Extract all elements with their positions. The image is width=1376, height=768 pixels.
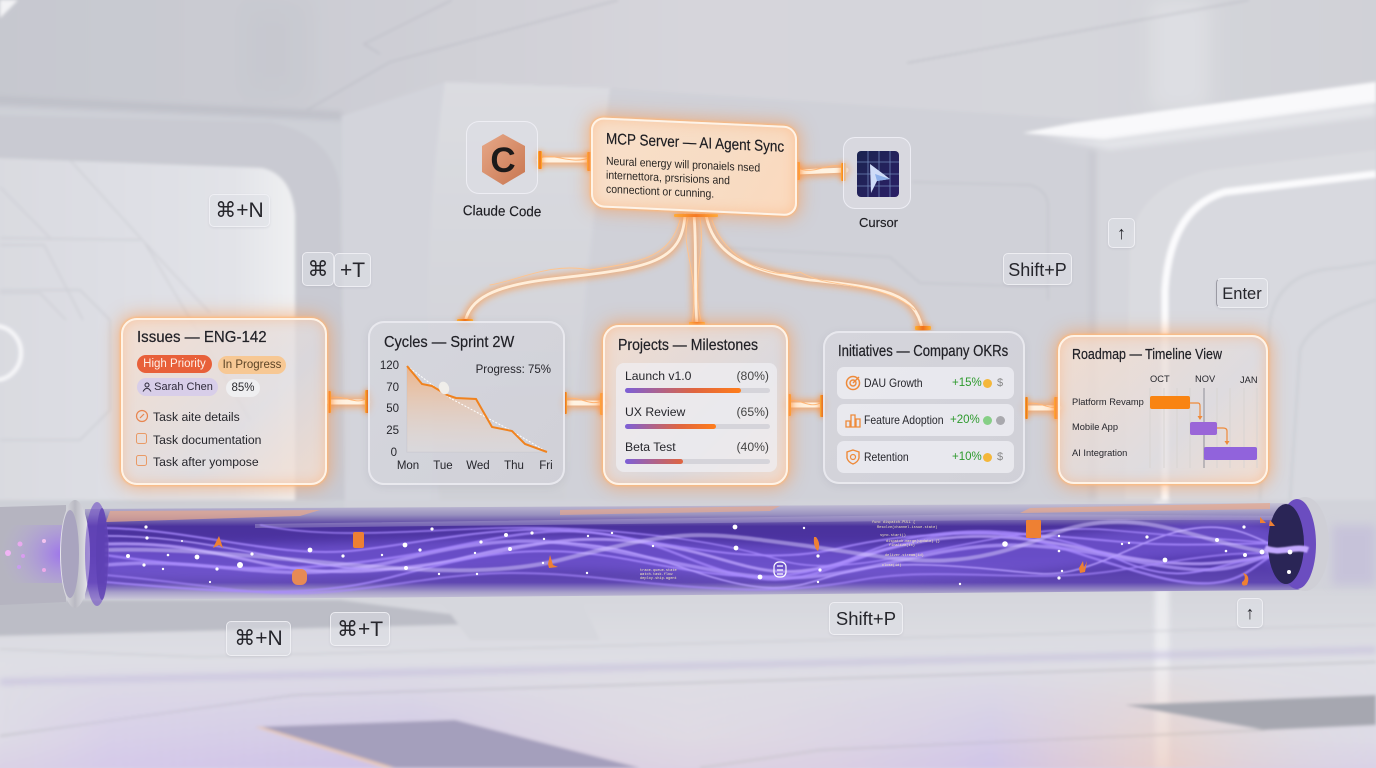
tile: Claude Code: [463, 121, 541, 219]
center column: [342, 82, 445, 500]
shortcut key: up arrow lower: ↑: [1246, 603, 1254, 623]
heading: Roadmap: Roadmap — Timeline View: [1072, 346, 1222, 363]
shortcut key: Enter: [1216, 278, 1268, 308]
OKR row: DAU Growth: DAU Growth: [864, 376, 923, 390]
heading: Issues: Issues — ENG-142: [137, 329, 267, 346]
shortcut key: Cmd+T lower: ⌘+T: [337, 618, 383, 641]
arc: MCP to Initiatives: [706, 215, 922, 328]
gantt chart: OCT: [1150, 374, 1170, 384]
OKR row: Feature Adoption: Feature Adoption: [864, 413, 944, 427]
burndown chart: 0: [391, 447, 397, 459]
gantt chart: AI Integration: [1072, 448, 1127, 458]
burndown chart: Mon: [397, 460, 419, 472]
description: [606, 156, 760, 201]
description: Neural energy will pronaiels nsed: [606, 156, 760, 175]
panel: MCP Server: [591, 117, 797, 216]
shortcut key: Cmd: [302, 252, 334, 286]
burndown chart: 25: [386, 425, 399, 437]
shortcut key: up arrow lower: [1237, 598, 1263, 628]
ceiling seams: [307, 0, 1249, 110]
ceiling light strip: [1023, 82, 1376, 140]
milestone list: (65%): [736, 405, 769, 419]
shortcut key: Shift+P lower: Shift+P: [836, 608, 896, 629]
status pills: Sarah Chen: [154, 381, 213, 393]
status pills: [137, 355, 286, 397]
shortcut key: +T: [334, 253, 371, 287]
shortcut key: Shift+P lower: [829, 602, 903, 635]
shortcut key: Cmd+N lower: [226, 621, 291, 656]
icon: Cursor arrow grid: [843, 137, 911, 209]
OKR row: DAU Growth: [837, 367, 1014, 399]
burndown chart: Tue: [433, 460, 453, 472]
icon: Claude hexagon: [466, 121, 538, 194]
burndown chart: [380, 360, 553, 472]
shortcut key: Shift+P upper: Shift+P: [1008, 260, 1067, 280]
label: Claude Code: Claude Code: [463, 202, 541, 219]
shortcut key: Cmd: ⌘: [308, 258, 328, 281]
status pills: In Progress: [223, 359, 281, 371]
milestone list: Launch v1.0: [625, 369, 691, 383]
code snippets in tube: [640, 520, 940, 581]
code snippets in tube: close(id): [882, 563, 901, 568]
code snippets in tube: Resolve(channel.issue.state): [877, 525, 937, 530]
left wall: [0, 100, 345, 590]
milestone list: (80%): [736, 369, 769, 383]
burndown chart: Progress: 75%: [476, 364, 551, 376]
OKR row: DAU Growth: $: [997, 377, 1003, 389]
status pills: High Priority: [143, 358, 206, 370]
burndown chart: 70: [386, 382, 399, 394]
burndown chart: Thu: [504, 460, 524, 472]
description: connectiont or cunning.: [606, 184, 714, 201]
OKR row: Retention: [837, 441, 1014, 473]
milestone list: UX Review: [625, 405, 685, 419]
burndown chart: Fri: [539, 460, 553, 472]
gantt chart: JAN: [1240, 375, 1258, 385]
particles: [126, 525, 1287, 585]
code snippets in tube: func dispatch.PULL {: [872, 520, 915, 525]
panel: Issues: [121, 318, 327, 485]
label: Cursor: Cursor: [859, 215, 898, 230]
gantt chart: Platform Revamp: [1072, 397, 1144, 407]
shortcut key: Cmd+N lower: ⌘+N: [234, 627, 283, 650]
panel: Cycles: [368, 321, 565, 485]
shortcut key: Shift+P upper: [1003, 253, 1072, 285]
lower band and floor: [0, 590, 1376, 768]
gantt chart: [1072, 374, 1258, 468]
tile: Cursor: [843, 137, 911, 230]
horizontal links: [329, 156, 1059, 408]
heading: Cycles: Cycles — Sprint 2W: [384, 334, 514, 351]
code snippets in tube: trace.queue.state: [640, 568, 677, 573]
panel: Roadmap: [1058, 335, 1268, 484]
heading: Initiatives: Initiatives — Company OKRs: [838, 343, 1008, 360]
heading: MCP Server: MCP Server — AI Agent Sync: [606, 131, 784, 156]
shortcut key: Enter: Enter: [1222, 285, 1262, 303]
shortcut key: +T: +T: [340, 259, 365, 282]
code snippets in tube: dispatch.merge(update) {}: [886, 539, 940, 544]
code snippets in tube: deliver.stream(id): [885, 553, 924, 558]
burndown chart: 120: [380, 360, 399, 372]
status pills: 85%: [231, 382, 255, 394]
OKR row: DAU Growth: +15%: [952, 377, 982, 389]
code snippets in tube: watch.task.flow: [640, 572, 673, 577]
arc: MCP to Projects: [686, 215, 702, 325]
task list: Task documentation: [153, 433, 261, 447]
code snippets in tube: deploy.ship.agent: [640, 576, 677, 581]
code snippets in tube: finalize(tx): [889, 543, 915, 548]
panel: Projects: [603, 325, 788, 485]
left pipe stub: [0, 505, 70, 605]
panel: Initiatives: [823, 331, 1025, 484]
arc: MCP to Issues/Cycles: [465, 215, 685, 322]
shortcut key: up arrow upper: [1108, 218, 1135, 248]
code snippets in tube: sync.start(): [880, 533, 906, 538]
task list: Task aite details: [153, 410, 240, 424]
gantt chart: NOV: [1195, 374, 1216, 384]
task list: Task after yompose: [153, 455, 259, 469]
OKR row: Retention: +10%: [952, 451, 982, 463]
burndown chart: 50: [386, 403, 399, 415]
orange data icons: [213, 517, 1266, 586]
milestone list: (40%): [736, 440, 769, 454]
shortcut key: Cmd+T lower: [330, 612, 390, 646]
tube body: [85, 503, 1300, 600]
gantt chart: Mobile App: [1072, 422, 1118, 432]
shortcut key: Cmd+N upper: [209, 194, 270, 227]
description: internettora, prsrisions and: [606, 170, 730, 187]
right wall with arch: [1091, 112, 1376, 500]
shortcut key: up arrow upper: ↑: [1117, 223, 1126, 243]
heading: Projects: Projects — Milestones: [618, 337, 758, 354]
OKR row: Feature Adoption: [837, 404, 1014, 436]
icon: Claude hexagon: C: [490, 141, 516, 180]
task list: [136, 410, 261, 469]
OKR row: Retention: $: [997, 451, 1003, 463]
right tube collar: [1265, 497, 1376, 591]
white chip icon: [774, 562, 786, 577]
milestone list: [616, 363, 777, 472]
left tube collar: [60, 500, 109, 608]
OKR row: Retention: Retention: [864, 450, 909, 464]
burndown chart: Wed: [466, 460, 490, 472]
milestone list: Beta Test: [625, 440, 676, 454]
shortcut key: Cmd+N upper: ⌘+N: [215, 199, 264, 222]
OKR row: Feature Adoption: +20%: [950, 414, 980, 426]
light strands: [105, 522, 1300, 593]
